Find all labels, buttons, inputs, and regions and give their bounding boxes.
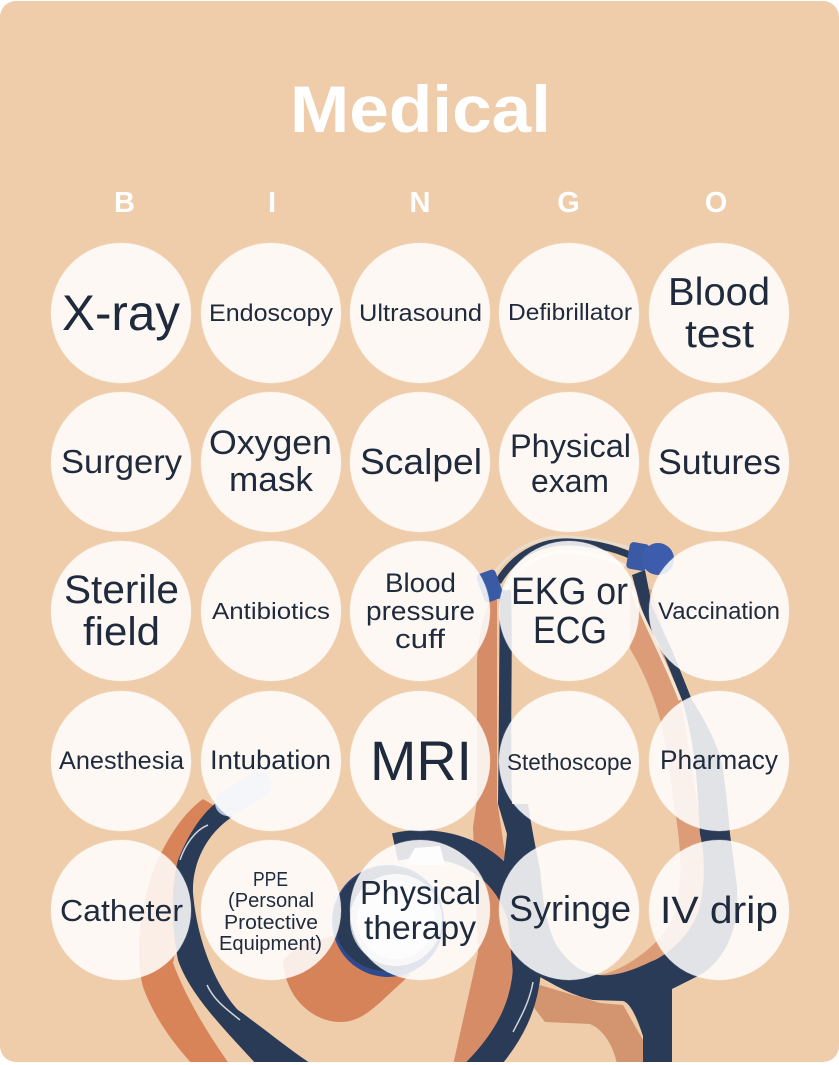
cell: Pharmacy — [649, 691, 789, 831]
cell: IV drip: IV drip — [660, 890, 778, 932]
column headers: BINGO: B — [114, 187, 135, 219]
cell: EKG or ECG: EKG or — [511, 571, 628, 613]
cell: Oxygen mask: Oxygen — [209, 424, 332, 462]
cell: IV drip — [649, 840, 789, 980]
cell: Blood test — [649, 243, 789, 383]
cell: Intubation — [201, 691, 341, 831]
cell: Antibiotics — [201, 541, 341, 681]
cell: Vaccination — [649, 541, 789, 681]
column headers: BINGO: I — [268, 187, 276, 219]
cell: Physical exam: Physical — [510, 428, 631, 464]
cell: Blood pressure cuff — [350, 541, 490, 681]
column headers: BINGO: N — [410, 187, 430, 219]
cell: PPE (Personal Protective Equipment): Protective — [224, 912, 318, 934]
cell: Catheter — [51, 840, 191, 980]
title: Medical — [290, 72, 551, 146]
cell: Intubation: Intubation — [210, 745, 331, 775]
cell: Ultrasound — [350, 243, 490, 383]
cell: Sterile field: Sterile — [64, 568, 179, 612]
cell: Scalpel — [350, 392, 490, 532]
cell: Pharmacy: Pharmacy — [660, 745, 778, 775]
cell: Blood pressure cuff: pressure — [366, 596, 475, 626]
cell: Syringe: Syringe — [509, 888, 631, 929]
cell: Ultrasound: Ultrasound — [359, 300, 482, 327]
cell: Physical therapy: therapy — [364, 909, 477, 946]
cell: PPE (Personal Protective Equipment): PPE — [253, 869, 288, 891]
cell: X-ray — [51, 243, 191, 383]
cell: Anesthesia — [51, 691, 191, 831]
column headers: BINGO: G — [557, 187, 580, 219]
cell: Catheter: Catheter — [60, 893, 183, 928]
cell: Stethoscope: Stethoscope — [507, 749, 632, 775]
cell: PPE (Personal Protective Equipment): (Personal — [228, 890, 314, 912]
cell: Defibrillator: Defibrillator — [508, 299, 632, 325]
cell: PPE (Personal Protective Equipment) — [201, 840, 341, 980]
cell: Blood pressure cuff: cuff — [395, 624, 446, 654]
cell: Sterile field — [51, 541, 191, 681]
cell: Blood test: Blood — [668, 271, 770, 314]
cell: Sutures — [649, 392, 789, 532]
cell: Sutures: Sutures — [658, 443, 781, 482]
cell: MRI — [350, 691, 490, 831]
cell: Oxygen mask — [201, 392, 341, 532]
cell: Physical exam: exam — [531, 463, 609, 499]
cell: EKG or ECG — [499, 541, 639, 681]
cell: MRI: MRI — [370, 729, 472, 792]
cell: Blood test: test — [685, 313, 754, 356]
cell: Surgery — [51, 392, 191, 532]
column headers: BINGO — [114, 187, 727, 219]
cell: Antibiotics: Antibiotics — [212, 598, 330, 624]
cell: Surgery: Surgery — [61, 443, 183, 480]
cell: Physical therapy: Physical — [360, 874, 481, 911]
cell: Sterile field: field — [83, 610, 160, 654]
cell: Physical exam — [499, 392, 639, 532]
cell: Defibrillator — [499, 243, 639, 383]
cell: Blood pressure cuff: Blood — [385, 568, 456, 598]
cell: Oxygen mask: mask — [229, 461, 314, 499]
column headers: BINGO: O — [705, 187, 727, 219]
cell: Stethoscope — [499, 691, 639, 831]
cell: X-ray: X-ray — [62, 285, 180, 341]
cell: Syringe — [499, 840, 639, 980]
cell: Scalpel: Scalpel — [360, 441, 482, 482]
cell: Endoscopy — [201, 243, 341, 383]
cell: EKG or ECG: ECG — [533, 610, 607, 652]
illustration: stethoscope — [139, 537, 737, 1065]
cell: Anesthesia: Anesthesia — [59, 747, 184, 775]
cell: Endoscopy: Endoscopy — [209, 300, 333, 327]
cell: Vaccination: Vaccination — [658, 598, 780, 625]
cell: PPE (Personal Protective Equipment): Equipment) — [219, 933, 322, 955]
cell: Physical therapy — [350, 840, 490, 980]
